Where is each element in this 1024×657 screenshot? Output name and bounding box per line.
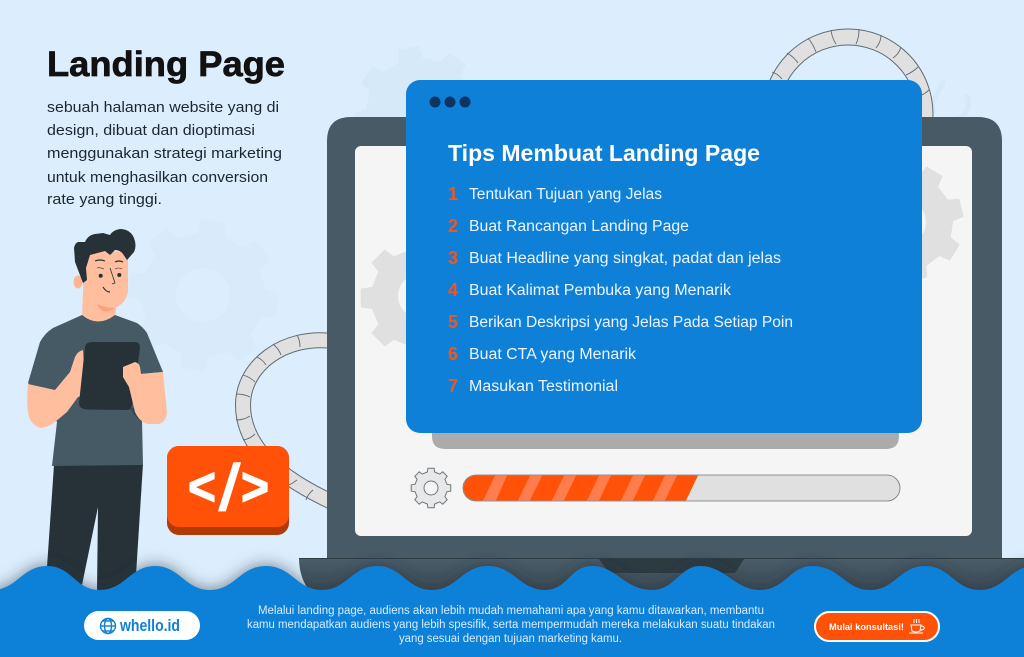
neck — [82, 290, 118, 322]
description — [47, 99, 282, 208]
illustration: man with tablet — [27, 229, 167, 592]
description: untuk menghasilkan conversion — [47, 169, 268, 186]
logo text: whello.id — [119, 616, 180, 635]
code symbol: < — [188, 457, 216, 517]
consult button — [815, 612, 939, 641]
background gear: top — [344, 36, 496, 188]
laptop — [299, 117, 1024, 600]
button label: Mulai konsultasi! — [829, 622, 904, 633]
tips list: Buat Rancangan Landing Page — [469, 218, 689, 235]
footer text: yang sesuai dengan tujuan marketing kamu. — [399, 633, 622, 645]
window dots — [430, 96, 470, 108]
hair — [74, 229, 136, 283]
cable: left loop — [236, 335, 332, 502]
progress bar — [463, 475, 900, 501]
description: design, dibuat dan dioptimasi — [47, 122, 255, 139]
tips list: Masukan Testimonial — [469, 378, 618, 395]
code button — [167, 446, 289, 535]
progress fill — [463, 476, 698, 500]
ear — [74, 276, 82, 288]
footer wave band — [0, 566, 1024, 657]
head — [83, 250, 128, 308]
footer text: Melalui landing page, audiens akan lebih mudah memahami apa yang kamu ditawarkan, membantu — [258, 605, 764, 617]
tips list: Tentukan Tujuan yang Jelas — [469, 186, 662, 203]
tips list: Berikan Deskripsi yang Jelas Pada Setiap Poin — [469, 314, 793, 331]
description: sebuah halaman website yang di — [47, 99, 279, 116]
background decoration: top right curves — [932, 82, 968, 118]
face details — [95, 260, 123, 292]
tips list: 2 — [448, 216, 458, 236]
laptop lid — [327, 117, 1002, 570]
code symbol — [188, 451, 269, 525]
screen gear: left — [361, 239, 479, 357]
tips list: 5 — [448, 312, 458, 332]
cable: top arc — [771, 29, 929, 191]
icon: globe — [100, 618, 116, 634]
tips list: Buat CTA yang Menarik — [469, 346, 636, 363]
icon: progress gear — [411, 468, 451, 508]
description: menggunakan strategi marketing — [47, 145, 282, 162]
card shadow — [432, 420, 899, 449]
tips list: Buat Headline yang singkat, padat dan jelas — [469, 250, 781, 267]
laptop screen — [355, 146, 972, 536]
code symbol: > — [241, 457, 269, 517]
shirt — [28, 315, 163, 466]
footer text: kamu mendapatkan audiens yang lebih spesifik, serta mempermudah mereka melakukan suatu tindakan — [247, 619, 775, 631]
pants — [47, 464, 143, 592]
code symbol: / — [216, 451, 243, 525]
right arm — [123, 362, 167, 424]
title: Landing Page — [47, 45, 285, 84]
tips list: 7 — [448, 376, 458, 396]
tips list: 6 — [448, 344, 458, 364]
tips list — [448, 184, 793, 396]
laptop notch — [599, 559, 744, 573]
laptop base — [299, 558, 1024, 600]
progress stripes — [483, 476, 677, 500]
tablet shadow under arm — [130, 408, 143, 421]
tips list: Buat Kalimat Pembuka yang Menarik — [469, 282, 731, 299]
tips list: 3 — [448, 248, 458, 268]
logo pill — [84, 611, 200, 640]
icon: coffee cup — [909, 619, 924, 633]
tips list: 1 — [448, 184, 458, 204]
chin shade — [97, 304, 115, 312]
description: rate yang tinggi. — [47, 191, 162, 208]
tablet — [79, 342, 140, 410]
panel: tips card — [406, 80, 922, 433]
card heading: Tips Membuat Landing Page — [448, 140, 760, 166]
screen gear: right — [832, 150, 976, 294]
background gear: left — [118, 210, 288, 380]
footer text — [247, 605, 775, 645]
left arm — [27, 350, 86, 428]
tips list: 4 — [448, 280, 458, 300]
